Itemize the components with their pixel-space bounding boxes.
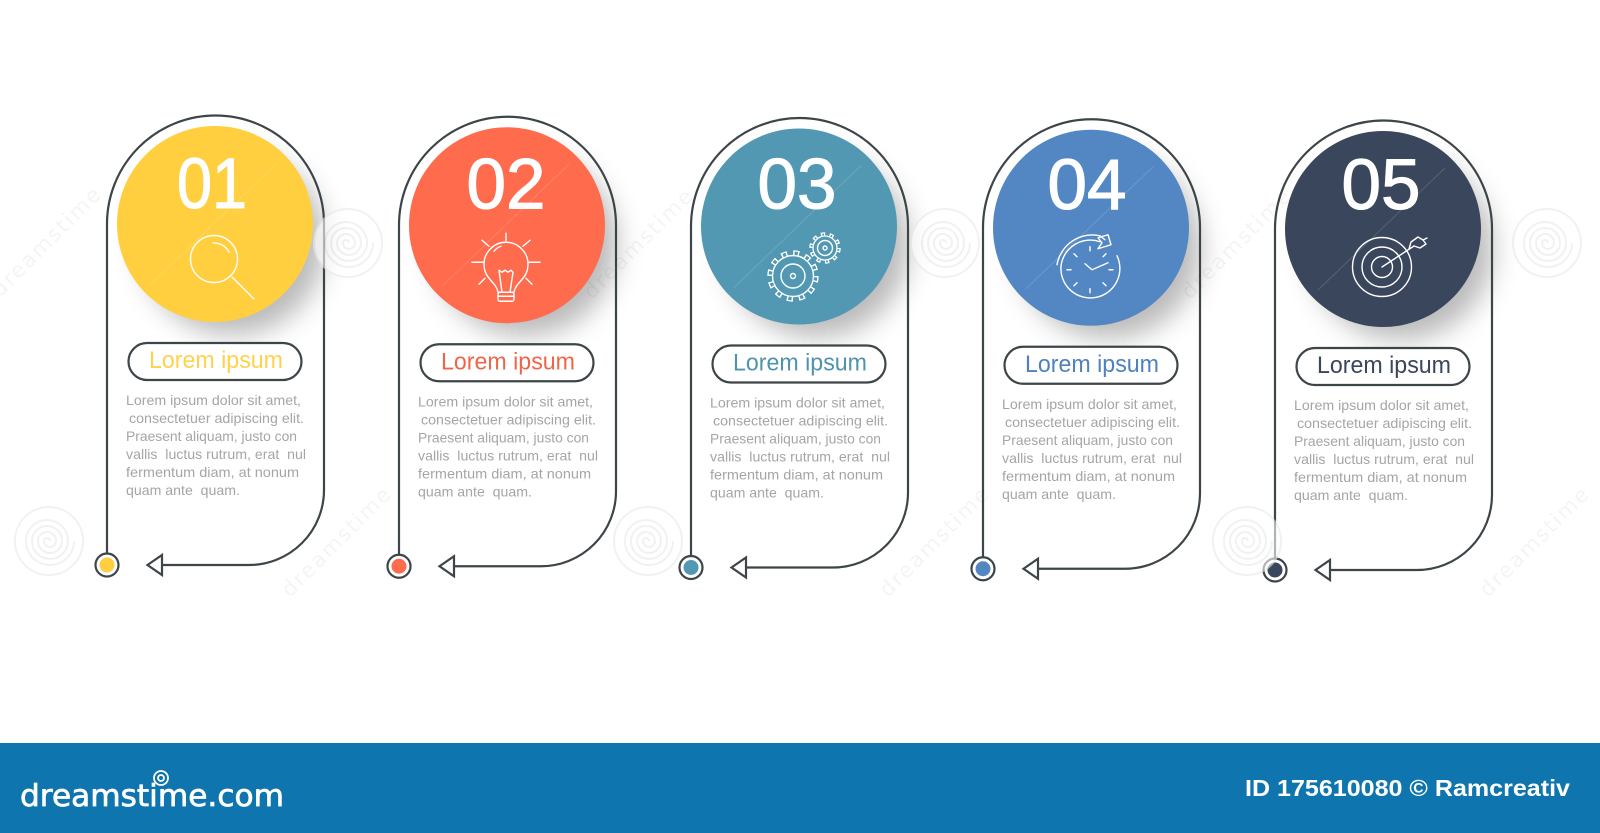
title pill: Lorem ipsum — [1317, 352, 1451, 379]
number 03: 03 — [758, 146, 836, 224]
body text: Praesent aliquam, justo con — [1294, 433, 1465, 449]
panel: step 01 — [96, 115, 325, 576]
image id credit: ID 175610080 © Ramcreativ — [1245, 775, 1570, 801]
title pill — [420, 344, 594, 381]
body text: Praesent aliquam, justo con — [126, 428, 297, 444]
start dot — [388, 555, 410, 578]
start dot — [680, 556, 702, 579]
circle shadow — [725, 154, 909, 338]
watermark overlay: dreamstime — [277, 481, 397, 602]
body text: quam ante quam. — [1294, 487, 1408, 503]
title pill: Lorem ipsum — [733, 350, 867, 376]
title pill — [1004, 347, 1178, 384]
navy number circle — [1285, 131, 1481, 327]
body text: Praesent aliquam, justo con — [710, 430, 881, 446]
body text — [418, 393, 598, 499]
watermark overlay: dreamstime — [1475, 481, 1595, 602]
body text: quam ante quam. — [418, 483, 532, 499]
icon: light bulb — [472, 233, 540, 301]
title pill: Lorem ipsum — [441, 348, 575, 375]
number 05: 05 — [1342, 146, 1420, 225]
outline with arrow — [399, 117, 616, 576]
red number circle — [409, 127, 605, 323]
body text: Lorem ipsum dolor sit amet, — [418, 393, 593, 409]
body text: Lorem ipsum dolor sit amet, — [1002, 396, 1177, 412]
watermark overlay — [0, 181, 1595, 602]
icon: clock with arrow — [1057, 235, 1120, 298]
circle shadow — [1309, 156, 1493, 340]
body text: consectetuer adipiscing elit. — [129, 410, 304, 426]
teal number circle — [701, 128, 897, 324]
watermark overlay: dreamstime — [875, 481, 995, 602]
start dot — [1264, 558, 1286, 582]
title pill — [1296, 348, 1470, 385]
circle shadow — [141, 151, 325, 335]
body text: consectetuer adipiscing elit. — [1297, 415, 1472, 431]
icon: gears — [770, 234, 838, 299]
body text: consectetuer adipiscing elit. — [1005, 414, 1180, 430]
icon: target with arrow — [1352, 237, 1427, 296]
body text — [1002, 396, 1182, 502]
title pill — [128, 343, 302, 380]
title pill — [712, 346, 886, 382]
body text: Praesent aliquam, justo con — [418, 429, 589, 445]
body text: fermentum diam, at nonum — [126, 464, 299, 480]
start dot — [96, 554, 118, 576]
body text: fermentum diam, at nonum — [1002, 468, 1175, 484]
panel: step 03 — [680, 118, 909, 579]
watermark overlay: dreamstime — [579, 183, 699, 304]
start dot — [972, 557, 994, 580]
yellow number circle — [117, 126, 313, 322]
body text: Lorem ipsum dolor sit amet, — [710, 394, 885, 410]
number 02: 02 — [467, 145, 545, 224]
panel: step 02 — [388, 117, 617, 578]
body text: vallis luctus rutrum, erat nul — [126, 446, 306, 462]
body text: fermentum diam, at nonum — [418, 465, 591, 481]
body text: fermentum diam, at nonum — [1294, 469, 1467, 485]
outline with arrow — [107, 115, 324, 575]
circle shadow — [433, 152, 617, 336]
panel: step 04 — [972, 119, 1201, 580]
outline with arrow — [691, 118, 908, 577]
body text: quam ante quam. — [710, 484, 824, 500]
footer band — [0, 743, 1600, 833]
outline with arrow — [983, 119, 1200, 579]
blue number circle — [993, 130, 1189, 326]
body text: consectetuer adipiscing elit. — [421, 411, 596, 427]
body text: quam ante quam. — [126, 482, 240, 498]
title pill: Lorem ipsum — [149, 347, 283, 374]
circle shadow — [1017, 155, 1201, 339]
panel: step 05 — [1264, 120, 1493, 581]
body text: fermentum diam, at nonum — [710, 466, 883, 482]
body text: vallis luctus rutrum, erat nul — [710, 448, 890, 464]
icon: magnifying glass — [190, 236, 254, 299]
watermark overlay: dreamstime — [1177, 183, 1297, 304]
body text: quam ante quam. — [1002, 486, 1116, 502]
body text — [1294, 397, 1474, 503]
body text: Lorem ipsum dolor sit amet, — [1294, 397, 1469, 413]
logo text: dreamstime.com — [20, 779, 284, 814]
body text: Praesent aliquam, justo con — [1002, 432, 1173, 448]
body text — [710, 394, 890, 500]
body text — [126, 392, 306, 498]
body text: vallis luctus rutrum, erat nul — [418, 447, 598, 463]
outline with arrow — [1275, 120, 1492, 580]
logo spiral — [154, 771, 168, 785]
title pill: Lorem ipsum — [1025, 351, 1159, 378]
body text: Lorem ipsum dolor sit amet, — [126, 392, 301, 408]
number 04: 04 — [1048, 146, 1126, 225]
body text: consectetuer adipiscing elit. — [713, 412, 888, 428]
body text: vallis luctus rutrum, erat nul — [1002, 450, 1182, 466]
body text: vallis luctus rutrum, erat nul — [1294, 451, 1474, 467]
number 01: 01 — [177, 145, 247, 224]
